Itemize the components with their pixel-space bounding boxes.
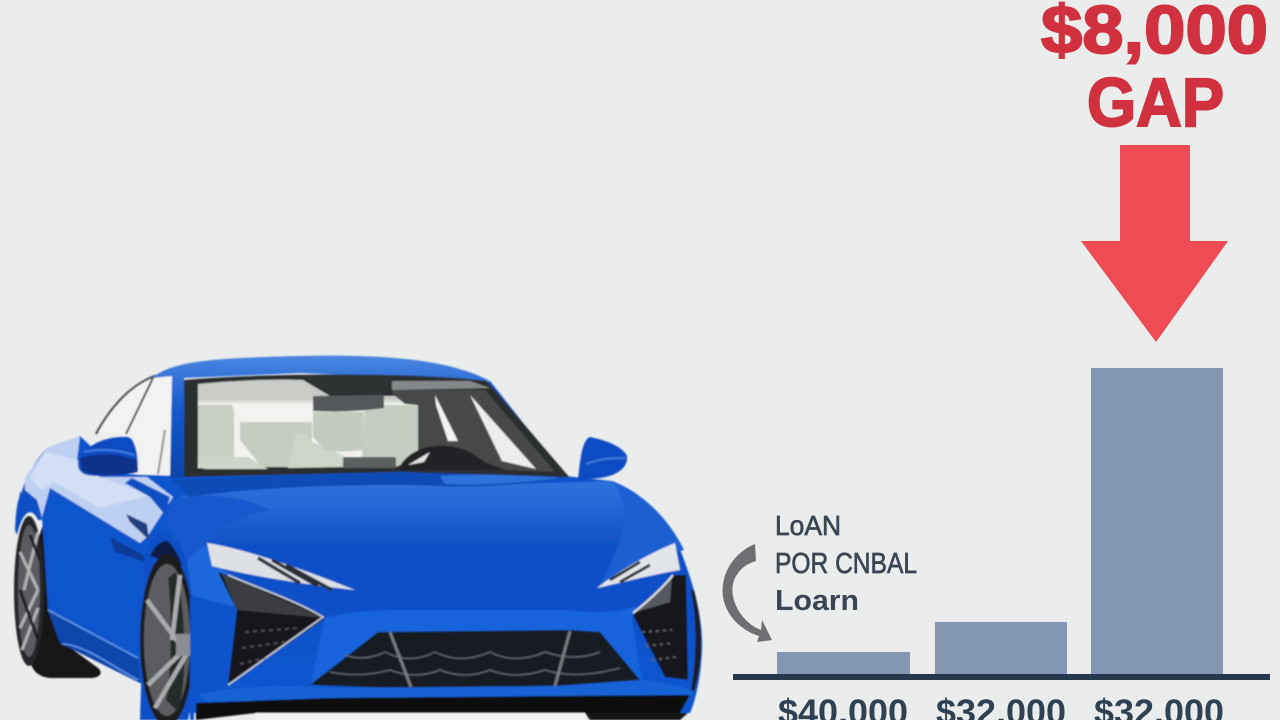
loan label text: POR CNBAL <box>775 548 917 580</box>
loan label text: LoAN <box>775 510 841 541</box>
car illustration <box>14 356 702 720</box>
console <box>343 457 396 468</box>
front lip <box>198 680 694 704</box>
left headlight <box>207 543 355 590</box>
right fascia edge <box>691 590 701 692</box>
windshield <box>184 374 570 478</box>
seat base <box>198 457 268 469</box>
left air intake <box>218 572 325 685</box>
arrow: red down arrow <box>1081 145 1228 342</box>
right front tire <box>585 713 688 720</box>
car body <box>15 381 702 713</box>
under-bumper shadow <box>196 695 690 720</box>
side panel highlight <box>25 436 173 543</box>
cowl highlight <box>440 475 560 485</box>
fender vent <box>126 514 149 540</box>
right door mirror <box>578 437 627 480</box>
fender light panel <box>187 545 236 607</box>
cowl band <box>172 473 572 497</box>
bumper crease <box>310 606 642 686</box>
right rear seat <box>288 434 345 468</box>
rear wheel arch <box>15 491 42 535</box>
left door mirror <box>78 437 138 476</box>
interior sky <box>198 380 418 468</box>
side panel lower sill <box>48 610 140 683</box>
rear seat <box>240 422 312 467</box>
lower grille <box>310 630 640 688</box>
bar: first $32,000 <box>935 622 1067 676</box>
loan label text <box>775 510 917 617</box>
reflection left <box>435 395 458 441</box>
right headlight <box>597 543 680 588</box>
side windows <box>96 375 172 474</box>
heading: $8,000 gap <box>1041 0 1268 141</box>
side reflection bright <box>30 452 150 508</box>
rear tire <box>14 516 101 678</box>
bar: second $32,000 <box>1091 368 1223 676</box>
ground gap <box>256 713 585 720</box>
icon: curved grey arrow <box>723 544 772 642</box>
rear-view mirror <box>313 395 384 412</box>
right front seat <box>313 412 364 452</box>
reflection right <box>470 395 536 469</box>
steering wheel <box>400 446 505 470</box>
front wheel arch <box>140 530 192 720</box>
door handle <box>110 537 145 562</box>
centre seat back <box>362 405 418 467</box>
roof <box>152 356 490 478</box>
heading: $8,000 gap: GAP <box>1087 64 1224 141</box>
left fender top <box>167 496 270 560</box>
axis line <box>733 674 1270 680</box>
right interior <box>392 390 555 472</box>
mirror mount <box>302 376 392 395</box>
left front seat <box>198 405 234 457</box>
front tire and rim <box>140 554 194 720</box>
bar: $40,000 <box>777 652 910 676</box>
sun visor <box>392 381 490 390</box>
hood and fascia <box>167 481 702 695</box>
fender lower front <box>190 597 236 720</box>
sill highlight <box>48 610 138 680</box>
loan label text: Loarn <box>775 585 859 617</box>
hood fold right <box>600 481 684 585</box>
bar chart <box>733 368 1270 720</box>
right air intake <box>633 575 688 680</box>
